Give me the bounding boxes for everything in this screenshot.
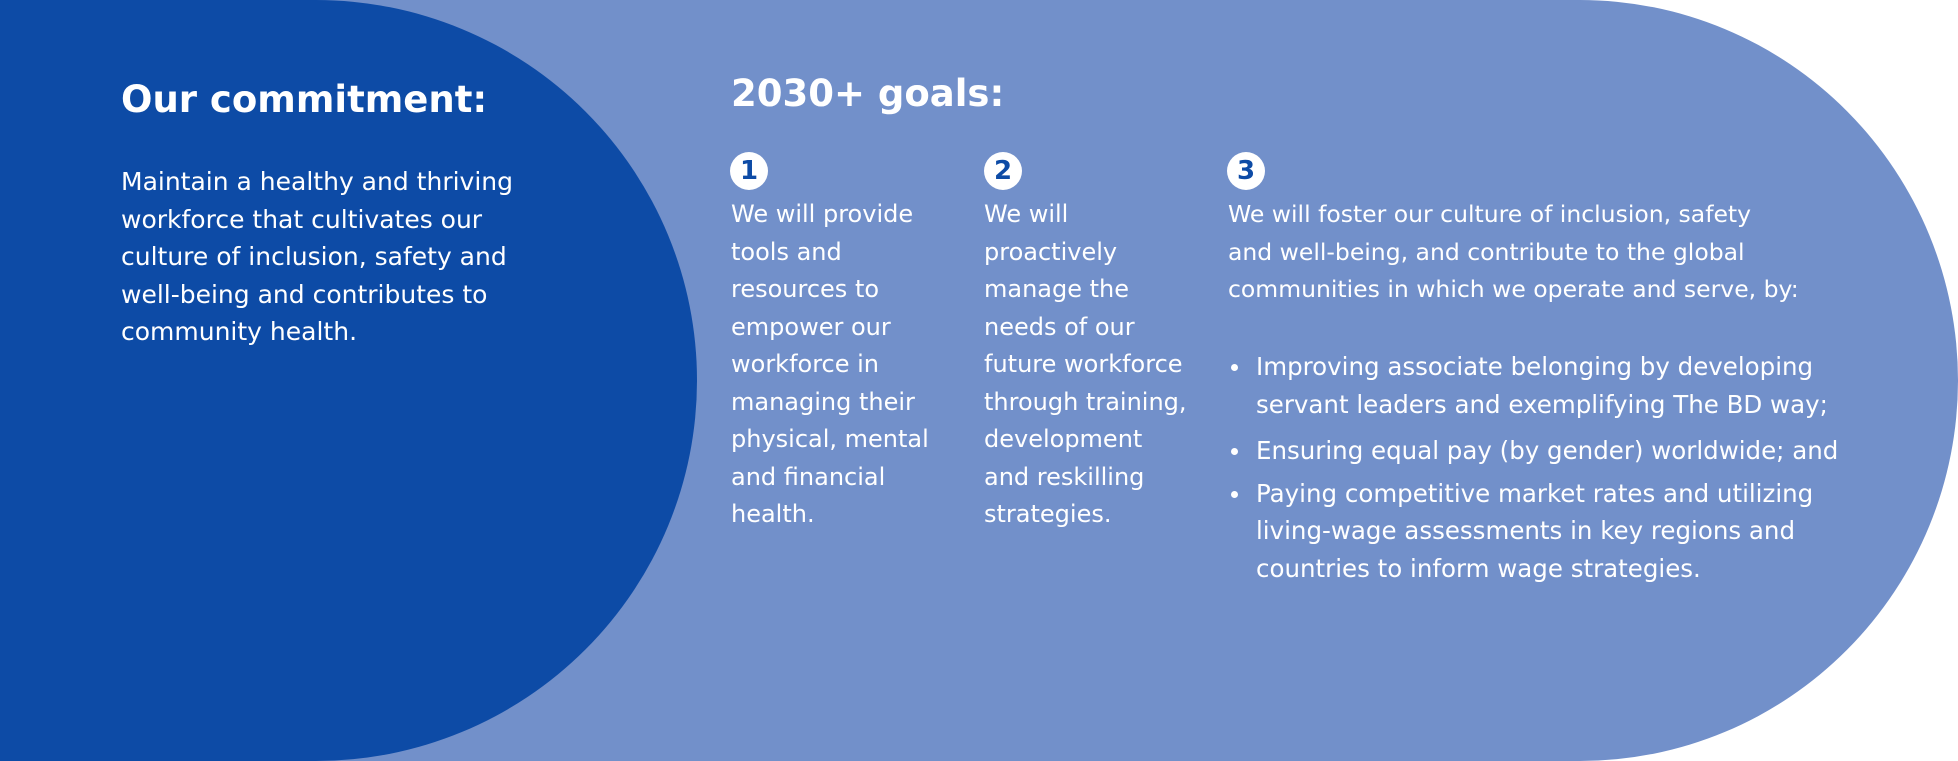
- goal 3 bullet list: servant leaders and exemplifying The BD way;: [1256, 390, 1828, 418]
- goal 1 text: empower our: [731, 312, 891, 340]
- goal 3 bullet list: countries to inform wage strategies.: [1256, 554, 1701, 582]
- icon: number 2: [984, 152, 1022, 190]
- goal 1 text: managing their: [731, 388, 915, 416]
- heading: Our commitment: Our commitment:: [121, 78, 487, 121]
- goal 2 text: future workforce: [984, 350, 1183, 378]
- icon: number 1: 1: [740, 156, 758, 186]
- commitment text: culture of inclusion, safety and: [121, 242, 507, 271]
- goal 1 text: physical, mental: [731, 425, 929, 453]
- commitment text: [121, 167, 513, 346]
- goal 1 text: resources to: [731, 275, 879, 303]
- goal 2 text: needs of our: [984, 312, 1135, 340]
- icon: number 1: [730, 152, 768, 190]
- goal 2 text: through training,: [984, 388, 1187, 416]
- goal 2 text: development: [984, 425, 1142, 453]
- goal 3 text: communities in which we operate and serve, by:: [1228, 275, 1799, 303]
- commitment text: Maintain a healthy and thriving: [121, 167, 513, 196]
- goal 1 text: and financial: [731, 462, 885, 490]
- goal 3 text: and well-being, and contribute to the global: [1228, 238, 1745, 266]
- goal 3 bullet list: Paying competitive market rates and utilizing: [1256, 478, 1813, 508]
- goal 2 text: and reskilling: [984, 462, 1144, 490]
- commitment text: well-being and contributes to: [121, 280, 487, 308]
- commitment text: community health.: [121, 317, 357, 346]
- goal 3 bullet list: Ensuring equal pay (by gender) worldwide; and: [1256, 436, 1838, 465]
- icon: number 3: [1227, 152, 1265, 190]
- heading: 2030+ goals: 2030+ goals:: [731, 72, 1004, 115]
- goal 2 text: proactively: [984, 238, 1117, 266]
- goal 1 text: We will provide: [731, 200, 913, 228]
- goal 1 text: health.: [731, 500, 815, 528]
- goal 3 bullet list: living-wage assessments in key regions and: [1256, 516, 1795, 545]
- goal 1 text: [731, 200, 929, 528]
- goal 3 text: We will foster our culture of inclusion, safety: [1228, 200, 1751, 228]
- goal 2 text: strategies.: [984, 500, 1111, 528]
- goal 3 bullet list: Improving associate belonging by developing: [1256, 352, 1813, 381]
- goal 2 text: We will: [984, 200, 1068, 228]
- icon: number 2: 2: [994, 156, 1012, 186]
- commitment text: workforce that cultivates our: [121, 204, 482, 234]
- goal 1 text: workforce in: [731, 350, 879, 378]
- goal 3 text: [1228, 200, 1799, 303]
- icon: number 3: 3: [1237, 156, 1255, 186]
- goal 2 text: [984, 200, 1187, 528]
- goal 1 text: tools and: [731, 238, 842, 266]
- goal 3 bullet list: [1231, 352, 1838, 582]
- goal 2 text: manage the: [984, 275, 1129, 303]
- dark panel: commitment: [0, 0, 697, 761]
